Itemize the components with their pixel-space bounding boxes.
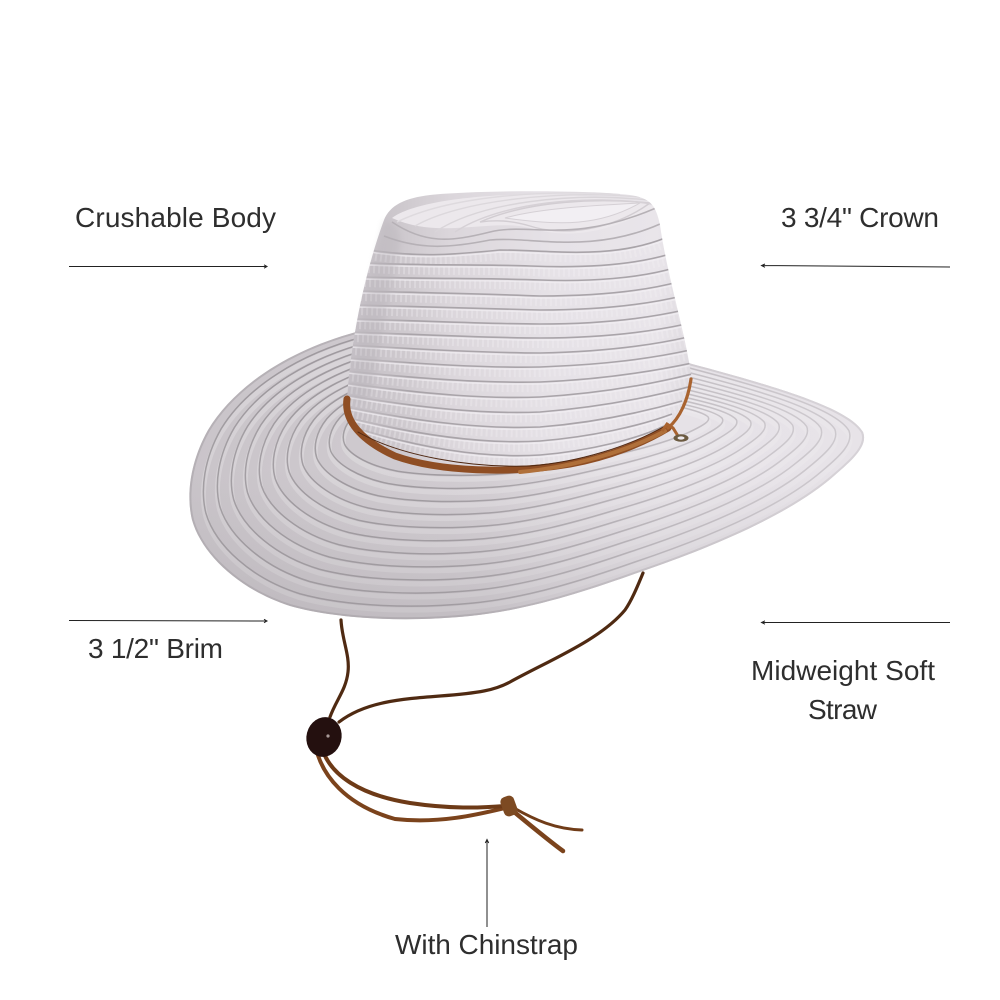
label: Crushable Body [69, 202, 276, 268]
label: material: Straw [808, 694, 878, 725]
arrow [69, 265, 267, 268]
chinstrap [316, 573, 643, 851]
brim [189, 323, 864, 619]
arrow [762, 264, 950, 267]
wooden bead [302, 713, 346, 761]
label: chinstrap: With Chinstrap [395, 929, 578, 960]
hat band [347, 379, 691, 472]
arrow [69, 619, 267, 623]
arrow [485, 840, 489, 927]
label: Crushable Body: Crushable Body [75, 202, 276, 233]
arrow [762, 621, 950, 624]
crown [346, 191, 692, 470]
woven texture [348, 254, 446, 459]
crown side shadow [350, 220, 400, 402]
crown top dent [384, 193, 660, 246]
label: brim width: 3 1/2" Brim [88, 633, 223, 664]
label: crown height: 3 3/4" Crown [781, 202, 939, 233]
label: chinstrap [395, 840, 578, 960]
label: material [751, 621, 950, 725]
label: material: Midweight Soft [751, 655, 935, 686]
label: brim width [69, 619, 267, 664]
hat [189, 191, 864, 851]
knot [499, 794, 519, 818]
label: crown height [762, 202, 950, 267]
eyelet and tie [662, 424, 688, 442]
